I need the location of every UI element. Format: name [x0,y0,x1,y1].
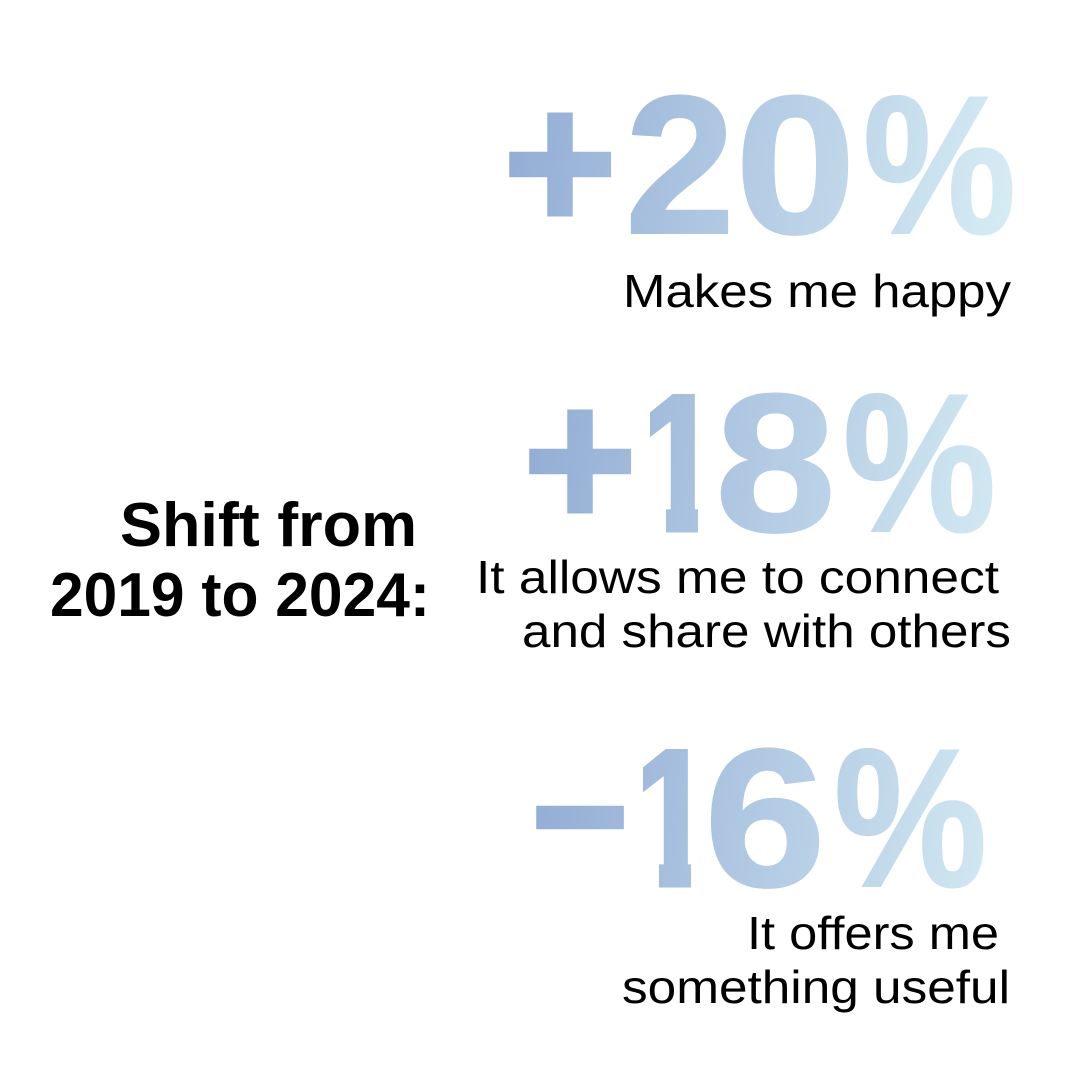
number: -16% [536,748,984,889]
stat: +20% makes me happy [503,52,1016,317]
number: +20%: 2 [625,55,735,275]
heading: shift from 2019 to 2024: 2019 to 2024: [50,561,430,630]
number: +18%: + [523,349,637,569]
stat: -16% something useful [536,748,1007,1012]
heading: shift from 2019 to 2024: Shift from [120,491,417,560]
number: +18% [529,392,992,534]
number: +18%: % [843,353,996,573]
number: +20% [503,52,1016,275]
label: something useful: something useful [622,961,1010,1013]
number: +18%: 1 [635,353,723,573]
number: -16%: 1 [628,708,716,928]
label: makes me happy: Makes me happy [623,265,1011,317]
label: something useful [622,907,1010,1013]
number: +20%: + [503,52,617,272]
number: +18%: 8 [715,353,836,573]
number: +20%: 0 [735,55,856,275]
number: +20%: % [863,55,1016,275]
label: connect and share: and share with others [522,605,1011,657]
number: -16%: % [834,708,987,928]
label: connect and share: It allows me to connect [476,551,999,603]
infographic canvas [52,94,1012,1012]
number: -16%: − [530,705,630,925]
stat: +18% connect and share [480,392,1010,648]
number: -16%: 6 [704,708,826,928]
label: something useful: It offers me [747,907,999,959]
heading: shift from 2019 to 2024 [50,491,430,630]
label: connect and share [476,551,1011,657]
